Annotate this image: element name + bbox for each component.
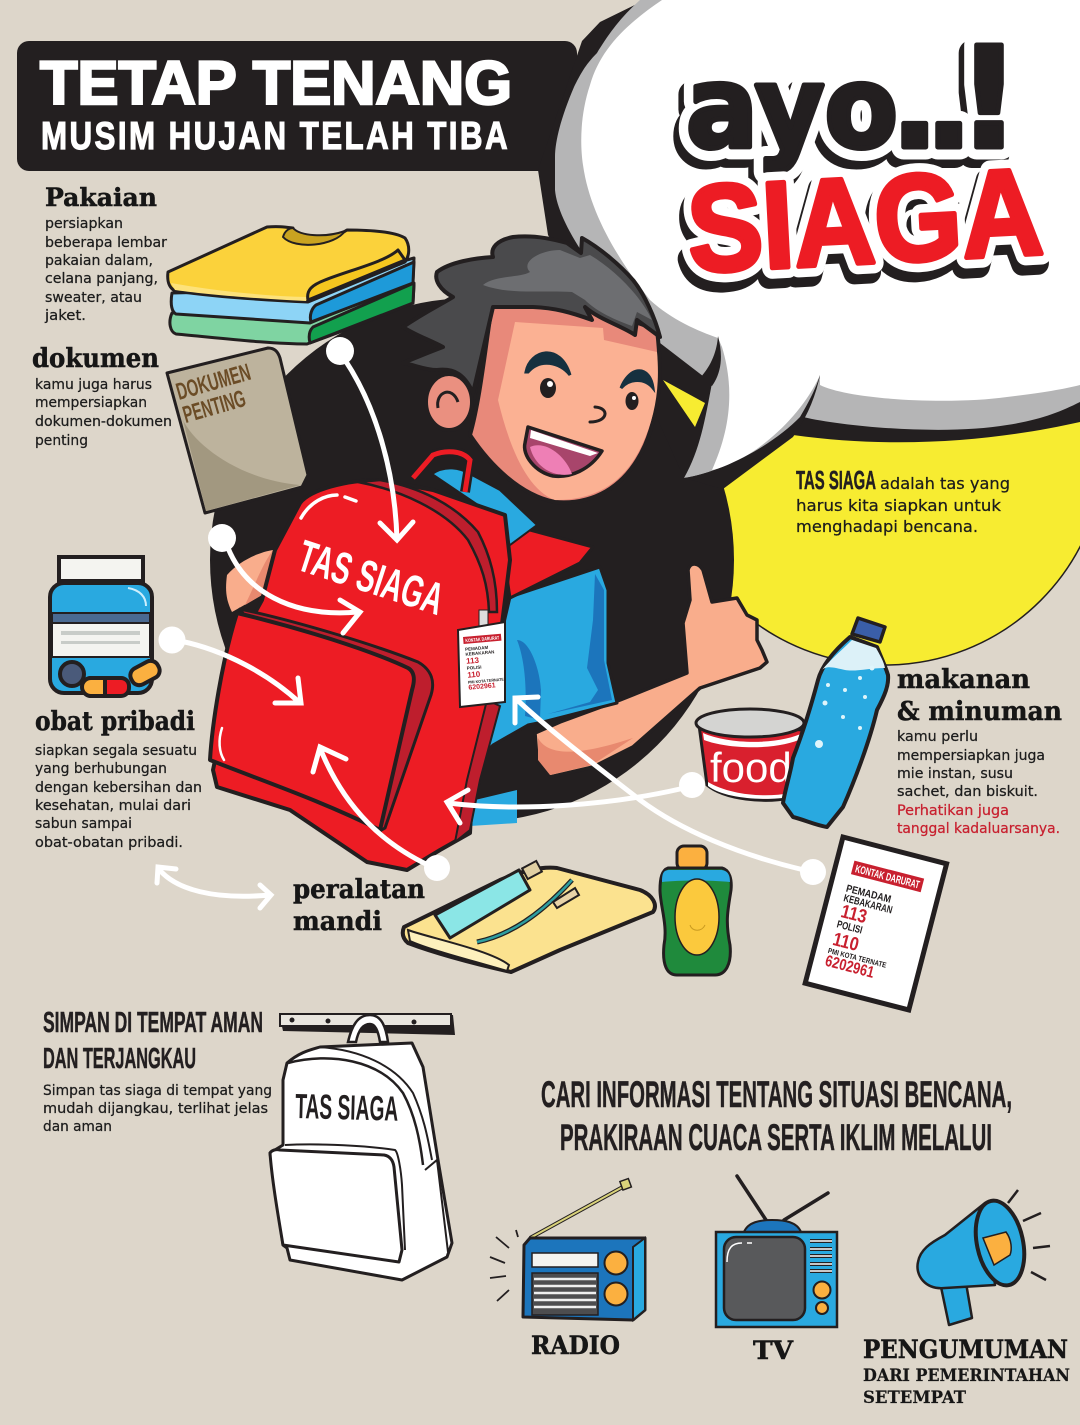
- heading: peralatan mandi: mandi: [293, 907, 382, 937]
- hair: [403, 236, 660, 393]
- arrow: food to bag: [447, 772, 705, 823]
- toothpaste: [435, 870, 530, 938]
- icon: tv: [716, 1176, 837, 1327]
- text: simpan: dan aman: [43, 1119, 112, 1135]
- siaga lettering: SIAGA: [681, 153, 1042, 308]
- text: makanan dan minuman: mie instan, susu: [897, 766, 1013, 782]
- title text: [40, 49, 512, 158]
- document book: DOKUMEN: [173, 359, 254, 406]
- ayo lettering: [681, 18, 1021, 189]
- ID tag: PEMADAM: [465, 645, 489, 652]
- character: boy: [226, 236, 767, 826]
- shoulder strap: [500, 530, 593, 598]
- pills: [60, 658, 162, 696]
- text: pakaian: celana panjang,: [45, 271, 158, 287]
- face highlight: [498, 322, 658, 500]
- emergency contact card: 6202961: [823, 953, 876, 982]
- ayo lettering: ..: [891, 32, 972, 177]
- heading: simpan: [43, 1007, 263, 1075]
- title text: TETAP TENANG: [40, 49, 512, 117]
- clothes stack: [168, 227, 414, 344]
- water bottle: [783, 618, 888, 827]
- elbow shade: [538, 738, 633, 775]
- icon: radio: [490, 1179, 645, 1320]
- label: pengumuman: PENGUMUMAN: [863, 1335, 1068, 1364]
- heading: makanan dan minuman: makanan: [897, 665, 1030, 695]
- text: makanan dan minuman: mempersiapkan juga: [897, 748, 1045, 764]
- text: pakaian: persiapkan: [45, 216, 123, 232]
- toothbrush: [477, 880, 572, 942]
- text: obat pribadi: yang berhubungan: [35, 761, 167, 777]
- text: obat pribadi: [35, 743, 202, 851]
- heading: peralatan mandi: peralatan: [293, 875, 425, 905]
- ear: [426, 374, 472, 430]
- food can: [696, 709, 805, 800]
- text: obat pribadi: sabun sampai: [35, 816, 132, 832]
- document book: [167, 348, 308, 513]
- ID tag: KONTAK DARURAT: [465, 635, 500, 644]
- bag body: [213, 480, 510, 870]
- heading: information sources: [541, 1074, 1012, 1158]
- shirt: [470, 567, 617, 826]
- left hand: [226, 550, 273, 612]
- yellow circle backdrop: [665, 225, 1080, 665]
- document book: PENTING: [180, 385, 249, 429]
- bag label text: TAS SIAGA: [295, 1087, 399, 1129]
- label: pengumuman: [863, 1335, 1070, 1408]
- arrow: medicine to bag: [158, 626, 301, 703]
- handle: [348, 1015, 388, 1042]
- emergency contact card: 110: [830, 929, 861, 956]
- arrow: contact card to tag: [515, 697, 826, 885]
- text: dokumen: [35, 377, 172, 449]
- title text: MUSIM HUJAN TELAH TIBA: [41, 115, 510, 158]
- label: radio: RADIO: [531, 1331, 620, 1360]
- ID tag: 110: [467, 670, 481, 680]
- tas siaga definition text: adalah tas yang: [880, 474, 1010, 493]
- text: makanan dan minuman: [897, 729, 1060, 837]
- shampoo bottle: [660, 846, 731, 975]
- food can: food: [710, 744, 792, 791]
- text: obat pribadi: kesehatan, mulai dari: [35, 798, 191, 814]
- text: pakaian: jaket.: [44, 308, 86, 324]
- heading: makanan dan minuman: [897, 665, 1062, 727]
- rail: [279, 1013, 455, 1035]
- heading: dokumen: dokumen: [32, 344, 159, 374]
- ID tag: [458, 610, 506, 707]
- white backpack on rail: [270, 1013, 455, 1280]
- text: dokumen: kamu juga harus: [35, 377, 152, 393]
- emergency contact card: KONTAK DARURAT: [854, 863, 921, 891]
- label: pengumuman: DARI PEMERINTAHAN: [863, 1366, 1070, 1386]
- ayo siaga lettering: [680, 18, 1046, 308]
- bag highlight: [301, 495, 356, 518]
- arrow: clothes to bag: [326, 337, 413, 540]
- pocket: [270, 1150, 402, 1262]
- text: pakaian: pakaian dalam,: [45, 253, 153, 269]
- emergency contact card: PMI KOTA TERNATE: [827, 946, 887, 970]
- text: makanan dan minuman: Perhatikan juga: [897, 803, 1009, 819]
- heading: pakaian: Pakaian: [45, 183, 157, 212]
- eyebrows: [526, 353, 653, 388]
- ayo lettering: ayo: [686, 42, 898, 174]
- towel and toothpaste: [403, 861, 655, 972]
- ayo lettering: ..: [886, 40, 968, 185]
- ayo lettering: ayo: [681, 50, 893, 182]
- label: tv: TV: [753, 1336, 794, 1365]
- heading: obat pribadi: obat pribadi: [35, 707, 195, 737]
- face: [470, 298, 659, 502]
- black circle backdrop: [210, 298, 734, 822]
- arrow: toiletries to bag: [313, 747, 450, 881]
- text: obat pribadi: obat-obatan pribadi.: [35, 835, 183, 851]
- text: obat pribadi: dengan kebersihan dan: [35, 780, 202, 796]
- ID tag: PMI KOTA TERNATE: [468, 677, 504, 685]
- ayo lettering: !: [952, 26, 1016, 189]
- bag handle: [413, 452, 470, 492]
- siaga lettering: SIAGA: [684, 144, 1046, 299]
- ayo lettering: ..: [891, 32, 972, 177]
- text: simpan: [43, 1083, 272, 1135]
- text: pakaian: sweater, atau: [45, 290, 142, 306]
- label: pengumuman: SETEMPAT: [863, 1388, 966, 1408]
- emergency contact card: 113: [839, 901, 869, 928]
- arrows and connector dots: [157, 337, 826, 908]
- text: makanan dan minuman: tanggal kadaluarsanya.: [897, 821, 1060, 837]
- banner background: [17, 41, 577, 171]
- hair highlight: [483, 250, 652, 326]
- text: obat pribadi: siapkan segala sesuatu: [35, 743, 197, 759]
- nose: [590, 407, 605, 422]
- mouth: [525, 427, 602, 476]
- text: makanan dan minuman: kamu perlu: [897, 729, 978, 745]
- arrow: double-headed: [157, 867, 271, 908]
- emergency contact card: [805, 837, 947, 1010]
- ayo lettering: ayo: [686, 42, 898, 174]
- text: dokumen: mempersiapkan: [35, 395, 147, 411]
- emergency contact card: POLISI: [835, 918, 864, 937]
- text: dokumen: penting: [35, 433, 88, 449]
- tas siaga definition text: TAS SIAGA: [796, 465, 876, 495]
- text: simpan: Simpan tas siaga di tempat yang: [43, 1083, 272, 1099]
- ID tag: 6202961: [468, 682, 496, 692]
- text: pakaian: beberapa lembar: [45, 235, 167, 251]
- emergency contact card: PEMADAM: [845, 883, 892, 906]
- zipper: [358, 480, 497, 612]
- red backpack: [210, 452, 510, 870]
- text: simpan: mudah dijangkau, terlihat jelas: [43, 1101, 268, 1117]
- siaga lettering: SIAGA: [684, 144, 1046, 299]
- ayo lettering: !: [957, 18, 1021, 181]
- heading: peralatan mandi: [293, 875, 425, 937]
- heading: simpan: SIMPAN DI TEMPAT AMAN: [43, 1007, 263, 1039]
- ayo lettering: !: [957, 18, 1021, 181]
- text: makanan dan minuman: sachet, dan biskuit.: [897, 784, 1038, 800]
- ID tag: 113: [466, 656, 480, 666]
- arm with thumbs up: [535, 564, 767, 777]
- eyes: [540, 378, 638, 410]
- text: pakaian: [44, 216, 167, 324]
- ID tag: KEBAKARAN: [465, 649, 495, 657]
- heading: makanan dan minuman: & minuman: [897, 697, 1062, 727]
- tas siaga definition text: harus kita siapkan untuk: [796, 496, 1002, 515]
- arrow: document to bag: [208, 524, 360, 633]
- icon: megaphone: [917, 1190, 1050, 1325]
- text: dokumen: dokumen-dokumen: [35, 414, 172, 430]
- bag label text: TAS SIAGA: [292, 530, 450, 625]
- bag: [270, 1043, 452, 1280]
- speech bubble: [538, 0, 1080, 489]
- medicine jar: [50, 557, 162, 696]
- tas siaga definition text: menghadapi bencana.: [796, 517, 978, 536]
- heading: simpan: DAN TERJANGKAU: [43, 1043, 196, 1075]
- front pocket: [210, 609, 433, 832]
- emergency contact card: KEBAKARAN: [842, 892, 894, 916]
- collar: [432, 468, 537, 545]
- tas siaga definition text: [796, 465, 1010, 536]
- ID tag: POLISI: [467, 665, 482, 671]
